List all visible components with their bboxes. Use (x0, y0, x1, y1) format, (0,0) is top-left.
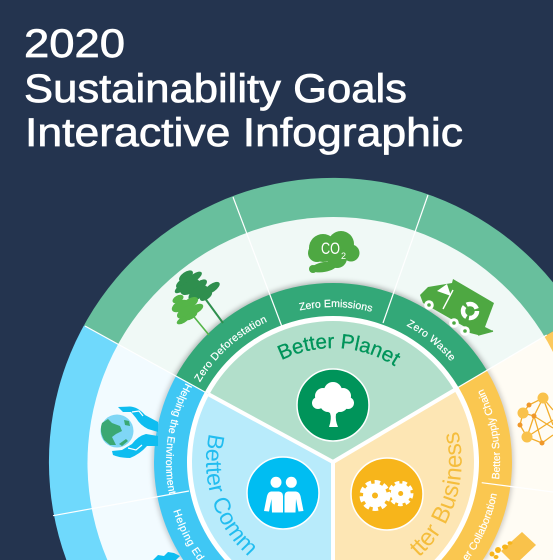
title: 2020 (24, 22, 125, 66)
goal labels: Better Collaboration (464, 494, 497, 560)
panel: better business sector (335, 331, 553, 560)
goal labels: Better Supply Chain (478, 389, 500, 479)
title: Sustainability Goals (24, 67, 407, 111)
icon: recycling truck (420, 279, 494, 336)
goal labels: Zero Emissions (298, 300, 372, 312)
icon: hands holding globe (100, 406, 158, 458)
icon: CO2 cloud: CO (321, 239, 340, 258)
goal labels: Helping the Environment (166, 384, 192, 494)
icon: tree badge (297, 369, 369, 441)
sector labels: Better Planet (277, 334, 400, 366)
icon: supply chain network (518, 392, 553, 446)
icon: CO2 cloud: 2 (341, 251, 346, 261)
icon: gears badge (351, 458, 423, 530)
icon: pine trees for zero deforestation (170, 268, 223, 335)
icon: people badge (247, 457, 319, 529)
icon: collaboration partial (490, 532, 536, 560)
goal labels: Zero Deforestation (194, 317, 267, 382)
goal labels: Zero Waste (406, 319, 454, 360)
panel: better community sector (48, 326, 331, 560)
title: Interactive Infographic (25, 111, 463, 155)
icon: helping education partial (153, 552, 180, 560)
title (24, 22, 463, 155)
panel: better planet sector (84, 178, 553, 460)
icon: CO2 cloud (308, 231, 360, 274)
